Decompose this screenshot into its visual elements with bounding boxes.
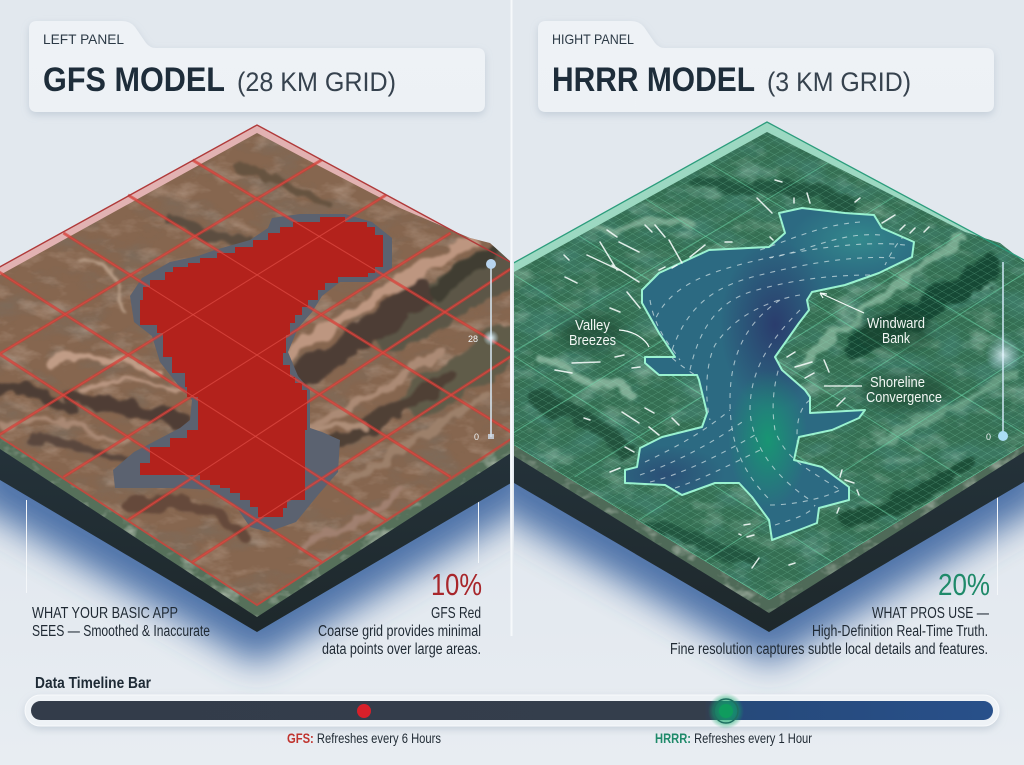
callout: Valley Breezes: [570, 319, 650, 348]
map drop shadow right: [514, 482, 1024, 688]
callout: Valley Breezes: Valley: [575, 317, 610, 334]
pixelated lake halo: [113, 214, 392, 532]
caption: basic app: WHAT YOUR BASIC APP: [32, 605, 178, 622]
left height scale: [468, 259, 499, 442]
water teal upper lobe: [808, 214, 911, 268]
marker: HRRR: [708, 693, 744, 729]
wind arrows on land: [555, 180, 929, 568]
marker: GFS: [357, 704, 371, 718]
coarse mint grid: [514, 162, 1024, 600]
grid size left: (28 KM GRID): [237, 67, 396, 97]
base slab: [0, 448, 511, 632]
coarse red grid: [0, 158, 510, 606]
callout: Windward Bank: [820, 293, 925, 347]
stat: GFS 10%: GFS Red: [431, 605, 481, 622]
thin guide line right: [997, 497, 998, 595]
terrain surface right: [514, 132, 1024, 600]
green texture dark: [514, 122, 1024, 612]
red coarse data blob: [140, 217, 383, 517]
terrain ridges: [0, 165, 510, 545]
stat: GFS 10%: [318, 567, 482, 658]
grid size right: (3 KM GRID): [767, 67, 911, 97]
panel: HRRR model: [446, 122, 1024, 665]
terrain surface: [0, 125, 512, 615]
lake water: [624, 207, 915, 541]
timeline heading: Data Timeline Bar: [35, 675, 151, 692]
terrain rim: [0, 430, 512, 620]
caption: basic app: SEES — Smoothed & Inaccurate: [32, 623, 210, 640]
fine mesh: [514, 122, 1024, 612]
timeline bar: [25, 693, 999, 729]
eyebrow right: HIGHT PANEL: [552, 31, 634, 47]
thin guide line left: [26, 500, 479, 593]
glass top strip right: [514, 122, 1024, 272]
timeline label: GFS: GFS: Refreshes every 6 Hours: [287, 730, 441, 746]
green texture light: [514, 122, 1024, 612]
callout: Shoreline Convergence: [824, 374, 942, 406]
stat: HRRR 20%: [670, 567, 990, 658]
callout: Windward Bank: Windward: [867, 315, 925, 332]
callout: Windward Bank: Bank: [882, 330, 910, 347]
stat: HRRR 20%: 20%: [938, 567, 990, 602]
lake shoreline: [625, 208, 914, 540]
glass top outline: [0, 125, 514, 269]
stat: HRRR 20%: WHAT PROS USE —: [872, 605, 989, 622]
header card: HRRR: [538, 21, 994, 112]
terrain texture dark: [0, 125, 512, 615]
green ridges: [540, 180, 1020, 560]
base slab right: [514, 448, 1024, 632]
water green glow: [736, 380, 800, 496]
header card: GFS: [29, 21, 485, 112]
heading left: GFS MODEL: [43, 61, 225, 99]
eyebrow left: LEFT PANEL: [43, 31, 124, 47]
water dark lower lobe: [626, 454, 708, 494]
caption: basic app: [32, 605, 210, 640]
terrain texture light: [0, 125, 512, 615]
water dark channel: [730, 255, 814, 392]
callout: Shoreline Convergence: Shoreline: [870, 374, 925, 391]
heading right: HRRR MODEL: [552, 61, 755, 99]
left height scale: 28: [468, 334, 478, 344]
map drop shadow left: [0, 480, 510, 688]
timeline label: HRRR: HRRR: Refreshes every 1 Hour: [655, 730, 812, 746]
wind flow streaks: [640, 222, 905, 525]
label halos: [560, 313, 948, 409]
stat: GFS 10%: data points over large areas.: [322, 641, 481, 658]
thin red lines over blob: [0, 160, 510, 562]
panel: GFS model: [0, 124, 510, 688]
right height scale: [985, 262, 1021, 442]
centre divider: [510, 0, 512, 636]
left height scale: 0: [474, 432, 479, 442]
callout: Valley Breezes: Breezes: [569, 332, 616, 349]
glass top outline right: [510, 122, 1024, 265]
stat: GFS 10%: 10%: [431, 567, 482, 602]
glass top strip: [0, 126, 444, 275]
callout: Shoreline Convergence: Convergence: [866, 389, 942, 406]
stat: GFS 10%: Coarse grid provides minimal: [318, 623, 481, 640]
right height scale: 0: [986, 432, 991, 442]
terrain rim right: [514, 445, 1024, 613]
